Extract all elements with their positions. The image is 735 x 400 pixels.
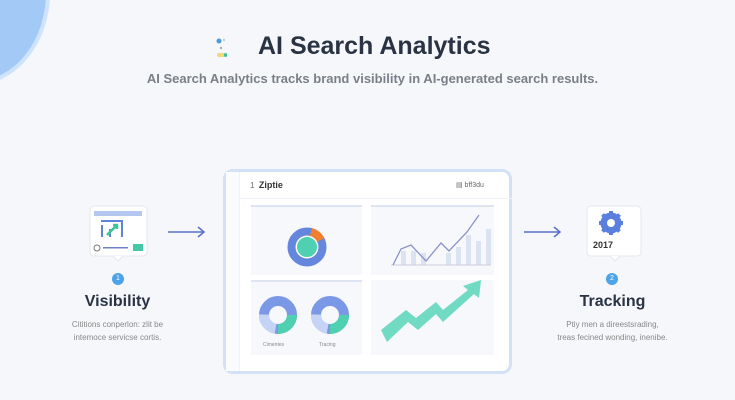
dashboard bbox=[223, 169, 512, 374]
text: treas fecined wonding, inenibe. bbox=[557, 332, 668, 342]
arrow bbox=[168, 226, 205, 238]
badge 2 bbox=[606, 273, 618, 285]
panel: visibility bbox=[72, 206, 163, 342]
icon: logo dots bbox=[216, 38, 227, 57]
text bbox=[72, 320, 163, 342]
icon: gear card: 2017 bbox=[593, 240, 613, 250]
text bbox=[557, 320, 668, 342]
dashboard: ▤ bff3du bbox=[456, 182, 484, 189]
heading: Visibility bbox=[85, 293, 150, 310]
text: Ptiy men a direestsrading, bbox=[566, 320, 659, 329]
text: intemoce servicse cortis. bbox=[74, 332, 161, 342]
decorative circle bbox=[0, 0, 50, 85]
chart: donut bbox=[251, 205, 362, 275]
badge 1: 1 bbox=[116, 275, 120, 282]
badge 2: 2 bbox=[610, 275, 614, 282]
icon: gear card bbox=[586, 206, 642, 262]
badge 1 bbox=[112, 273, 124, 285]
heading: Tracking bbox=[580, 293, 645, 310]
title: AI Search Analytics bbox=[258, 32, 491, 60]
subtitle: AI Search Analytics tracks brand visibility in AI-generated search results. bbox=[147, 71, 598, 86]
text: Cititions conperlon: zlit be bbox=[72, 320, 163, 329]
chart: two donuts: Tracing bbox=[319, 342, 336, 348]
arrow bbox=[524, 226, 561, 238]
icon: visibility card bbox=[90, 206, 148, 262]
sidebar bbox=[226, 172, 240, 371]
panel: tracking bbox=[557, 206, 668, 342]
chart: growth arrow bbox=[371, 280, 494, 355]
chart: line+bars bbox=[371, 205, 494, 275]
chart: two donuts bbox=[251, 280, 362, 355]
header: 1 Ziptie bbox=[250, 180, 283, 190]
chart: two donuts: Cimentes bbox=[263, 342, 284, 348]
